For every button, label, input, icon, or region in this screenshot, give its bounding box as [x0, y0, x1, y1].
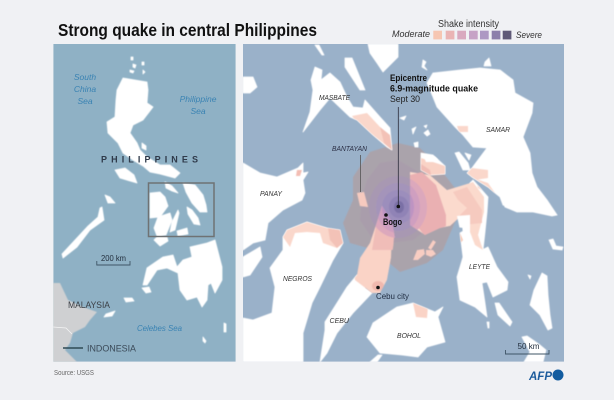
label: Philippines: PHILIPPINES: [101, 154, 198, 164]
callout: epicentre: Epicentre: [390, 73, 427, 83]
sea label: Philippine Sea: Sea: [190, 106, 206, 116]
marker: Cebu city: [376, 286, 410, 301]
scale bar: 200 km: 200 km: [101, 253, 126, 263]
source note: Source: USGS: [54, 368, 94, 377]
shake contours over land: [283, 113, 495, 318]
shake contours over water: [343, 143, 458, 272]
marker: Cebu city: Cebu city: [376, 291, 410, 301]
scale bar: 200 km: [97, 253, 130, 265]
label: Masbate: MASBATE: [319, 93, 351, 102]
callout: epicentre: [390, 73, 478, 208]
land: Philippine islands: [62, 57, 226, 343]
scale bar: 50 km: 50 km: [518, 342, 540, 351]
legend: shake intensity: Severe: [516, 30, 542, 41]
label: Bantayan with leader: BANTAYAN: [332, 144, 368, 153]
panel: epicentre detail map: [243, 44, 564, 362]
label: Leyte: LEYTE: [469, 262, 491, 271]
sea label: South China Sea: Sea: [77, 96, 93, 106]
logo: AFP: [528, 370, 564, 383]
title: Strong quake in central Philippines: [58, 20, 317, 40]
marker: Bogo: [383, 213, 402, 227]
label: Indonesia with leader: INDONESIA: [87, 344, 136, 354]
marker: Bogo: Bogo: [383, 217, 402, 227]
label: Samar: SAMAR: [486, 125, 511, 134]
legend: shake intensity: [392, 19, 542, 41]
label: Indonesia with leader: [63, 345, 136, 352]
label: Negros: NEGROS: [283, 274, 312, 283]
label: Cebu: CEBU: [330, 316, 350, 325]
legend: shake intensity: Shake intensity: [438, 19, 499, 30]
land: islands: [243, 44, 563, 362]
sea label: South China Sea: China: [74, 84, 96, 94]
sea label: Philippine Sea: Philippine: [180, 94, 217, 104]
scale bar: 50 km: [506, 342, 549, 354]
sea label: Celebes Sea: Celebes Sea: [137, 323, 182, 333]
label: Bohol: BOHOL: [397, 331, 421, 340]
infographic: [53, 20, 564, 380]
sea label: South China Sea: South: [74, 72, 96, 82]
callout: epicentre: 6.9-magnitude quake: [390, 84, 478, 94]
legend: shake intensity: Moderate: [392, 29, 430, 40]
callout: epicentre: Sept 30: [390, 94, 420, 104]
land: Malaysia: [53, 283, 97, 362]
logo: AFP: AFP: [528, 371, 552, 383]
label: Panay: PANAY: [260, 189, 283, 198]
locator box: [148, 183, 214, 236]
panel: Philippines overview map: [53, 44, 236, 362]
label: Bantayan with leader: [332, 144, 368, 192]
label: Malaysia: MALAYSIA: [68, 300, 110, 310]
